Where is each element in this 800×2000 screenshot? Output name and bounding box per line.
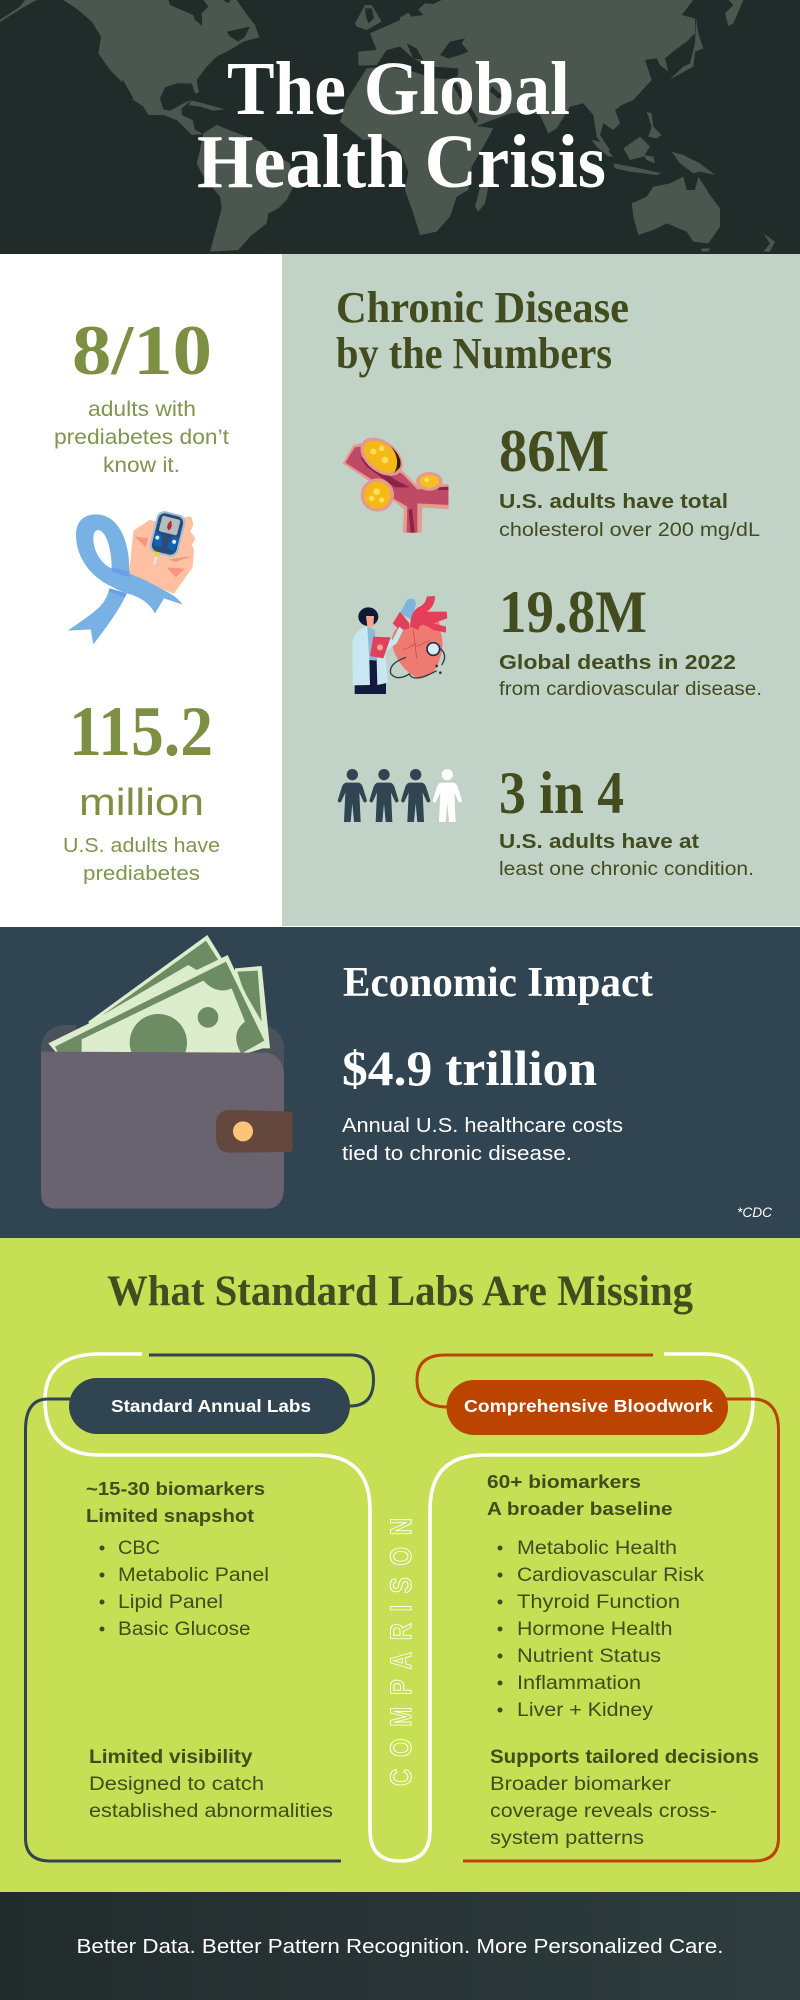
stat: 86M: cholesterol over 200 mg/dL [499,519,760,541]
source note: *CDC [737,1205,772,1220]
standard labs list: CBC [118,1538,160,1559]
icon: doctor with heart [352,596,447,694]
heading: What Standard Labs Are Missing [107,1268,693,1315]
title: The Global [227,47,570,131]
standard labs list: Basic Glucose [118,1619,250,1640]
heading: Chronic Disease [336,283,629,332]
icon: four people, three highlighted [338,769,462,822]
stat: 19.8M: from cardiovascular disease. [499,678,762,700]
column: comprehensive bloodwork content [487,1471,759,1849]
icon: wallet with cash [41,935,293,1209]
comprehensive takeaway: coverage reveals cross- [490,1801,717,1822]
pill: comprehensive bloodwork [446,1380,728,1435]
comprehensive list: Thyroid Function [517,1592,680,1613]
standard labs takeaway: Limited visibility [89,1747,253,1768]
column: standard labs content: ~15-30 biomarkers [86,1478,265,1499]
world map [0,0,775,252]
stat: 19.8M [499,579,762,700]
column: comprehensive bloodwork content: A broader baseline [487,1498,672,1519]
panel: chronic disease by the numbers [282,254,800,926]
stat: 86M: 86M [499,418,609,484]
right orange outline [417,1355,778,1861]
header panel [0,0,800,254]
stat: 3 in 4: U.S. adults have at [499,831,699,853]
stat: 115.2 million: U.S. adults have [63,834,220,857]
heading: Economic Impact [343,960,653,1006]
stat: $4.9 trillion: $4.9 trillion [342,1040,597,1096]
panel: prediabetes stats [0,254,282,926]
stat: 8/10 [54,312,229,477]
column: standard labs content: Limited snapshot [86,1505,254,1526]
stat: 8/10: prediabetes don’t [54,426,229,449]
stat: 86M [499,418,760,541]
pill: standard annual labs: Standard Annual Labs [111,1396,311,1416]
column: comprehensive bloodwork content: 60+ biomarkers [487,1471,641,1492]
standard labs list [100,1538,269,1640]
stat: 115.2 million [63,693,220,885]
stat: 3 in 4: least one chronic condition. [499,858,754,880]
heading: by the Numbers [336,329,612,378]
title: Health Crisis [197,120,606,204]
column: standard labs content [86,1478,333,1822]
stat: 3 in 4 [499,760,754,880]
comprehensive takeaway: Supports tailored decisions [490,1747,759,1768]
panel: economic impact [0,927,800,1238]
comprehensive takeaway [490,1747,759,1849]
icon: artery with plaque [343,430,449,533]
vertical label: comparison: COMPARISON [383,1518,418,1786]
comprehensive list: Liver + Kidney [517,1700,654,1721]
title [197,47,606,204]
icon: awareness ribbon and glucose meter [68,509,193,644]
panel: what standard labs are missing [0,1238,800,1892]
stat: 8/10: 8/10 [72,312,212,390]
footer [0,1892,800,2000]
stat: 86M: U.S. adults have total [499,491,728,513]
standard labs takeaway [89,1747,333,1822]
standard labs takeaway: established abnormalities [89,1801,333,1822]
stat: 115.2 million: million [79,782,204,824]
heading [336,283,629,378]
standard labs list: Metabolic Panel [118,1565,269,1586]
standard labs list: Lipid Panel [118,1592,223,1613]
stat: 115.2 million: prediabetes [83,862,200,885]
comprehensive list [498,1538,705,1721]
description [342,1115,623,1165]
stat: 19.8M: Global deaths in 2022 [499,652,736,674]
stat: 8/10: know it. [103,454,180,477]
footer: Better Data. Better Pattern Recognition. More Personalized Care. [76,1936,724,1958]
comprehensive list: Metabolic Health [517,1538,677,1559]
stat: 19.8M: 19.8M [499,579,647,645]
stat: 115.2 million: 115.2 [69,693,213,771]
comprehensive takeaway: system patterns [490,1828,644,1849]
comprehensive list: Inflammation [517,1673,641,1694]
standard labs takeaway: Designed to catch [89,1774,264,1795]
comprehensive list: Nutrient Status [517,1646,661,1667]
left navy outline [26,1355,374,1861]
comprehensive takeaway: Broader biomarker [490,1774,672,1795]
description: tied to chronic disease. [342,1143,572,1165]
comprehensive list: Cardiovascular Risk [517,1565,705,1586]
pill: comprehensive bloodwork: Comprehensive Bloodwork [464,1396,713,1416]
stat: 8/10: adults with [88,398,196,421]
comprehensive list: Hormone Health [517,1619,672,1640]
description: Annual U.S. healthcare costs [342,1115,623,1137]
stat: 3 in 4: 3 in 4 [499,760,624,826]
pill: standard annual labs [69,1378,350,1434]
comparison connector white line [45,1354,753,1861]
